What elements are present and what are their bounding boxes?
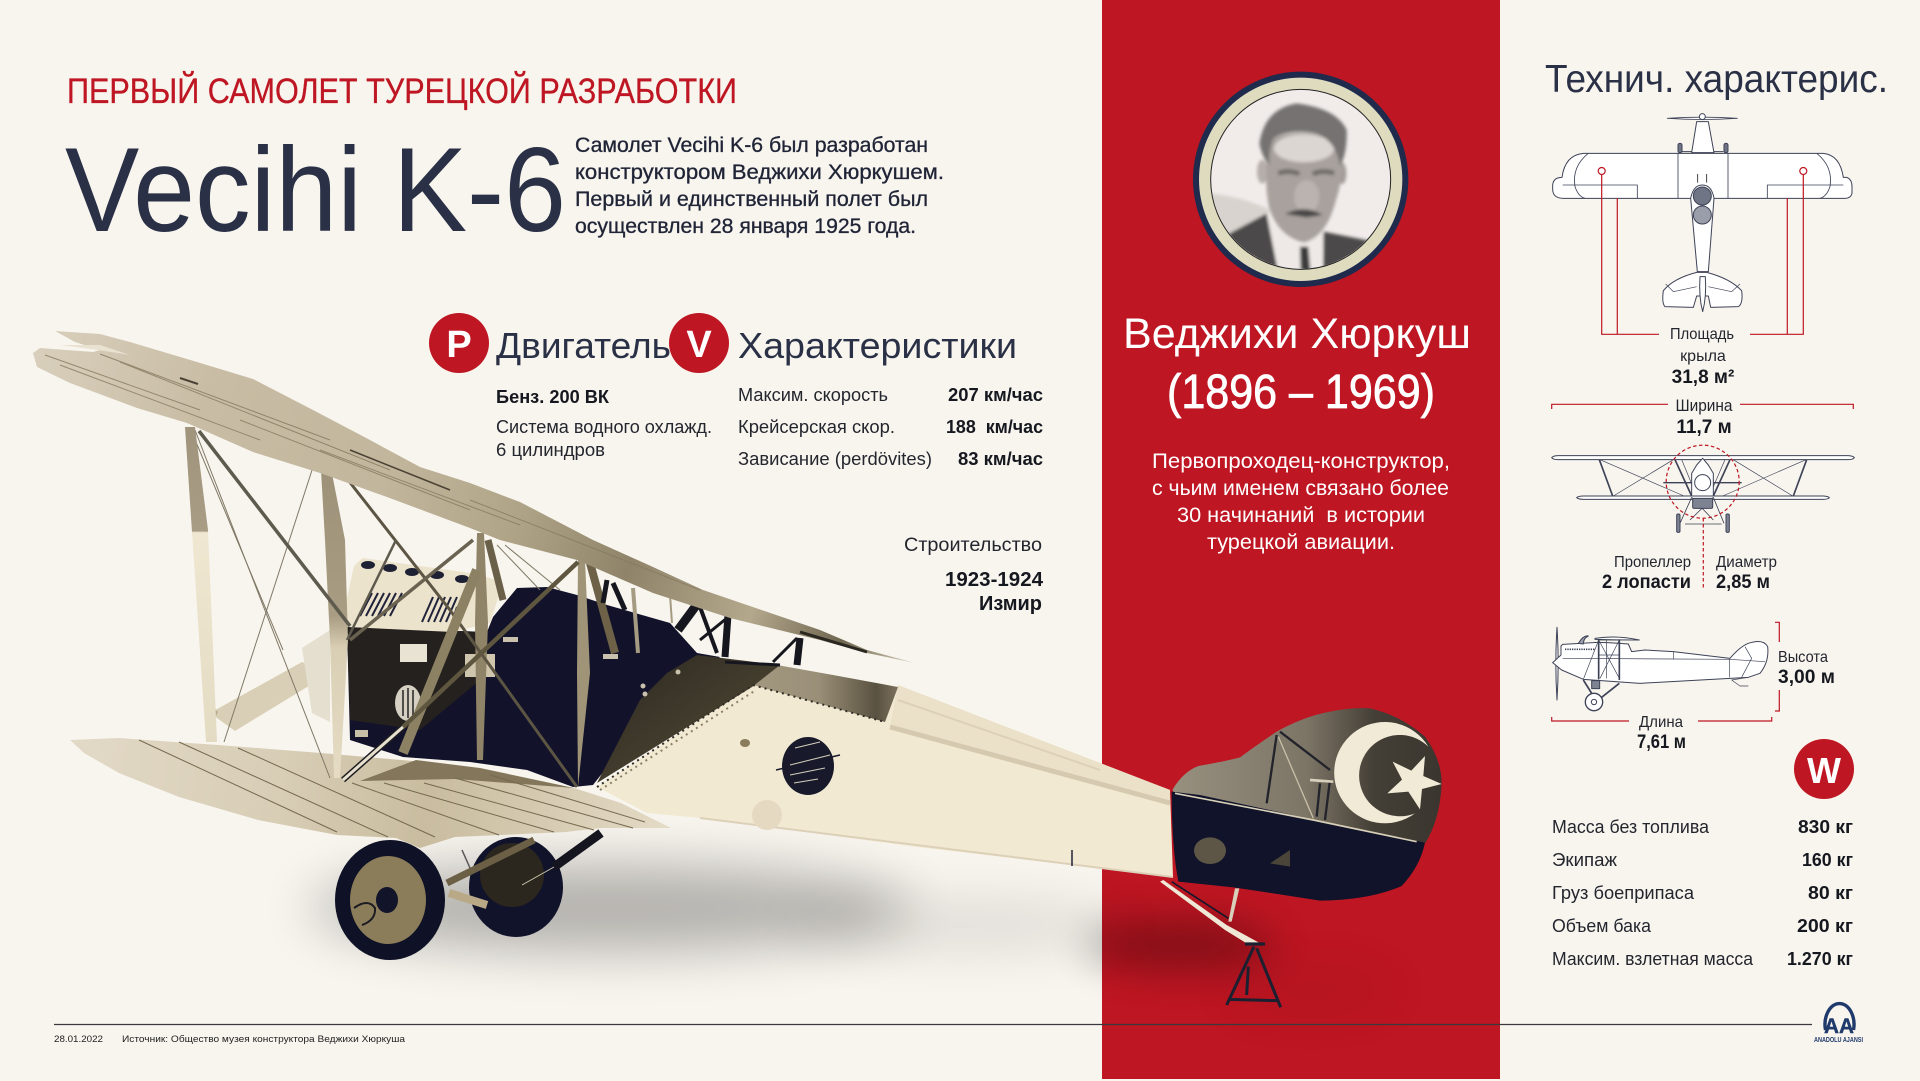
label: height bbox=[1778, 649, 1835, 688]
weight table bbox=[1552, 817, 1854, 969]
construction note: 1923-1924 bbox=[945, 569, 1044, 591]
engine details bbox=[496, 387, 712, 460]
logo: Anadolu Ajansi: AA bbox=[1824, 1015, 1854, 1038]
weight table: Груз боеприпаса bbox=[1552, 883, 1695, 903]
lower tail dark bbox=[1172, 792, 1425, 901]
white cowling bbox=[345, 558, 503, 632]
label: diameter: 2,85 м bbox=[1716, 572, 1770, 593]
icon: performance badge: V bbox=[686, 324, 712, 366]
label: length: 7,61 м bbox=[1637, 732, 1686, 753]
label: wing area: крыла bbox=[1680, 348, 1726, 365]
label: propeller: Пропеллер bbox=[1614, 554, 1691, 571]
bracing wires bbox=[191, 430, 560, 778]
fuselage bbox=[597, 685, 1173, 877]
dark body brown shade bbox=[347, 627, 487, 730]
performance table: 207 км/час bbox=[948, 385, 1043, 405]
weight table: Объем бака bbox=[1552, 916, 1652, 936]
kicker heading: ПЕРВЫЙ САМОЛЕТ ТУРЕЦКОЙ РАЗРАБОТКИ bbox=[67, 71, 737, 111]
intro text: Первый и единственный полет был bbox=[575, 188, 928, 211]
lower wing bbox=[70, 738, 671, 848]
olive side panel bbox=[597, 655, 780, 783]
fuselage top stripe bbox=[890, 685, 1170, 803]
icon: weight badge: W bbox=[1807, 750, 1841, 791]
fuselage emblem bbox=[776, 737, 840, 795]
wing struts bbox=[185, 427, 590, 787]
propeller blade bbox=[205, 630, 330, 731]
front wheel bbox=[335, 840, 445, 960]
performance table: 188 км/час bbox=[946, 417, 1043, 437]
dark body bbox=[347, 587, 720, 787]
icon: engine badge bbox=[429, 313, 489, 373]
icon: weight badge bbox=[1794, 739, 1854, 799]
label: wingspan bbox=[1676, 396, 1733, 438]
label: propeller: 2 лопасти bbox=[1602, 572, 1691, 593]
intro text: конструктором Веджихи Хюркушем. bbox=[575, 161, 944, 184]
tail white line bbox=[1175, 793, 1417, 842]
upper wing bbox=[33, 331, 915, 663]
heading: engine: Двигатель bbox=[496, 325, 671, 366]
bio name: Веджихи Хюркуш bbox=[1123, 310, 1471, 358]
undercarriage struts bbox=[447, 833, 601, 905]
logo: Anadolu Ajansi: ANADOLU AJANSI bbox=[1814, 1035, 1863, 1044]
bio text: турецкой авиации. bbox=[1207, 531, 1395, 554]
intro text: осуществлен 28 января 1925 года. bbox=[575, 215, 916, 238]
weight table: Максим. взлетная масса bbox=[1552, 949, 1754, 969]
tail struts bbox=[1267, 732, 1333, 820]
fin and rudder bbox=[1173, 708, 1442, 843]
label: height: 3,00 м bbox=[1778, 667, 1835, 688]
propeller diameter dashed marker bbox=[1666, 445, 1739, 590]
weight table: Экипаж bbox=[1552, 850, 1617, 870]
bio text: с чьим именем связано более bbox=[1152, 477, 1449, 500]
main title: Vecihi K-6 bbox=[65, 123, 566, 257]
bio name bbox=[1123, 310, 1471, 419]
weight table: 1.270 кг bbox=[1787, 949, 1853, 969]
panel: red biography column bbox=[1102, 0, 1500, 1079]
bio name: (1896 – 1969) bbox=[1167, 366, 1435, 419]
star bbox=[1387, 756, 1442, 809]
label: wing area bbox=[1670, 326, 1734, 388]
crescent bbox=[1334, 722, 1428, 823]
plane tail section over red panel bbox=[1160, 708, 1442, 1007]
skid stand bbox=[1227, 944, 1281, 1007]
footer source: Источник: Общество музея конструктора Веджихи Хюркуша bbox=[122, 1034, 406, 1045]
performance table: Зависание (perdövites) bbox=[738, 449, 932, 469]
footer date: 28.01.2022 bbox=[54, 1034, 103, 1045]
engine details: 6 цилиндров bbox=[496, 440, 605, 460]
bio text bbox=[1152, 450, 1450, 554]
performance table: 83 км/час bbox=[958, 449, 1043, 469]
diagram: side view bbox=[1553, 627, 1768, 711]
tail skid bbox=[1160, 880, 1263, 945]
weight table: 80 кг bbox=[1808, 883, 1854, 903]
engine details: Бенз. 200 ВК bbox=[496, 387, 610, 407]
label: length bbox=[1637, 714, 1686, 753]
performance table: Максим. скорость bbox=[738, 385, 888, 405]
icon: performance badge bbox=[669, 313, 729, 373]
specs heading: Технич. характерис. bbox=[1545, 58, 1888, 101]
label: propeller bbox=[1602, 554, 1691, 593]
logo: Anadolu Ajansi bbox=[1814, 1004, 1863, 1044]
rivets bbox=[597, 685, 885, 790]
label: wing area: 31,8 м² bbox=[1672, 367, 1734, 388]
construction note: Строительство bbox=[904, 535, 1042, 556]
height and length brackets bbox=[1552, 622, 1779, 721]
cockpit coaming bbox=[753, 665, 898, 722]
label: wingspan: 11,7 м bbox=[1676, 417, 1732, 438]
fuselage seams bbox=[700, 700, 1173, 877]
bio text: 30 начинаний в истории bbox=[1177, 504, 1425, 527]
label: wingspan: Ширина bbox=[1676, 396, 1733, 415]
performance table: Крейсерская скор. bbox=[738, 417, 895, 437]
rear wheel bbox=[469, 837, 563, 937]
icon: engine badge: P bbox=[446, 324, 472, 366]
diagram: front view bbox=[1552, 456, 1854, 532]
construction note bbox=[904, 535, 1044, 615]
heading: performance: Характеристики bbox=[738, 325, 1017, 366]
fuselage spots bbox=[740, 739, 782, 830]
label: height: Высота bbox=[1778, 649, 1828, 666]
engine plates bbox=[355, 644, 495, 737]
ground shadow under plane bbox=[310, 864, 1400, 1012]
bottom rule bbox=[54, 1024, 1812, 1026]
bio text: Первопроходец-конструктор, bbox=[1152, 450, 1450, 473]
strut fittings bbox=[503, 637, 680, 696]
intro text: Самолет Vecihi K-6 был разработан bbox=[575, 134, 928, 157]
wing area leader lines bbox=[1552, 168, 1853, 409]
tail dark patches bbox=[1194, 837, 1290, 867]
weight table: 160 кг bbox=[1802, 850, 1853, 870]
construction note: Измир bbox=[979, 593, 1042, 615]
plane photo illustration bbox=[33, 331, 1173, 960]
label: length: Длина bbox=[1639, 714, 1683, 731]
label: diameter bbox=[1716, 554, 1777, 593]
engine details: Система водного охлажд. bbox=[496, 417, 712, 437]
weight table: 830 кг bbox=[1798, 817, 1854, 837]
weight table: Масса без топлива bbox=[1552, 817, 1710, 837]
performance table bbox=[738, 385, 1043, 469]
portrait bbox=[1193, 72, 1408, 287]
diagram: top view bbox=[1553, 114, 1852, 312]
label: diameter: Диаметр bbox=[1716, 554, 1777, 571]
intro text bbox=[575, 134, 944, 238]
label: wing area: Площадь bbox=[1670, 326, 1734, 343]
diagonal struts bbox=[199, 431, 800, 787]
weight table: 200 кг bbox=[1797, 916, 1854, 936]
